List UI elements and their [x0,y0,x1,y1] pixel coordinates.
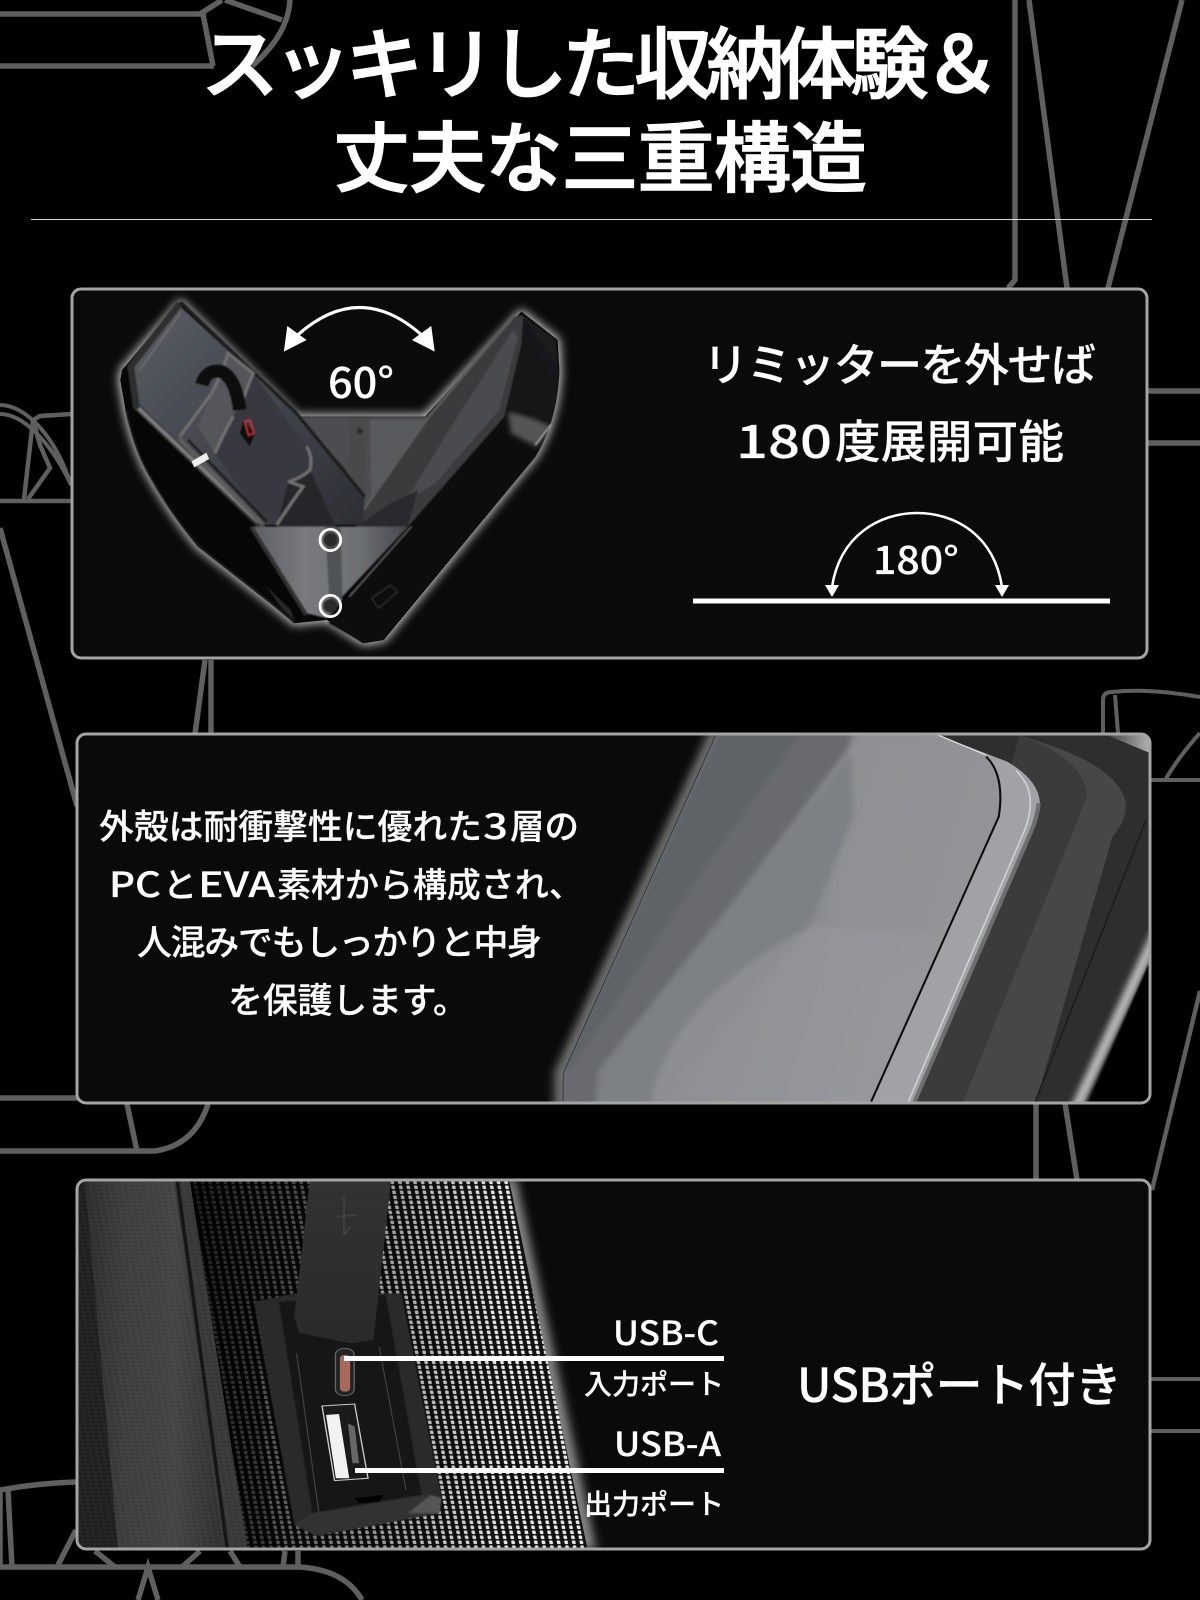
bright rim [868,733,1040,1107]
front gusset [251,527,408,618]
red logo tag [240,421,255,447]
photo: opened backpack [120,302,559,643]
panel: USB ports [73,1178,1150,1550]
label: 60 degrees: 60° [328,350,394,411]
text: shell description: PC [109,857,161,907]
left inner lid [134,305,365,525]
label: output port: 出力ポート [584,1483,724,1523]
heading: USB ports: USBポート付き [797,1347,1122,1416]
center gusset back [299,417,430,510]
rubber flap [294,1178,391,1343]
white tag [192,453,209,467]
title: 丈夫な三重構造 [333,98,867,209]
left fabric strips [78,1182,118,1548]
woven mesh [189,1178,588,1550]
text: shell description: を保護します。 [228,973,468,1024]
label: input port: 入力ポート [584,1363,724,1403]
arrow: 60 degree swing [284,307,435,352]
text: 180 degree opening: 度展開可能 [835,406,1064,472]
label: USB-A: USB-A [614,1418,722,1466]
title: スッキリした収納体験＆ [201,3,1001,115]
text: shell description: 外殻は耐衝撃性に優れた [99,800,482,850]
callout line: USB-A [355,1468,724,1473]
photo: layered hard shell [561,730,1164,1110]
lid pockets [198,353,253,453]
diagram: 180 degree arc: 180° [873,530,959,585]
text: shell description: 層の [510,799,579,849]
callout line: USB-C [344,1356,724,1361]
grab handle [202,371,240,410]
text: shell description: 素材から構成され、 [277,858,583,907]
black seam [870,757,1000,1103]
text: shell description: 3 [483,800,508,850]
USB-A port [322,1404,368,1481]
outer dark layers [942,736,1148,1102]
text: limiter release: リミッターを外せば [703,329,1096,394]
USB-C port [335,1348,354,1396]
port module [254,1293,442,1536]
main face [561,733,1001,1107]
text: shell description: と [163,858,197,907]
panel: 60 degree opening [72,289,1147,658]
title [201,3,1001,209]
text: shell description: 人混みでもしっかりと中身 [137,915,542,966]
text: 180 degree opening: 180 [736,406,832,471]
panel: shell structure [77,730,1164,1110]
text: 180 degree opening [736,406,1064,472]
right inner lid [356,315,523,527]
snap button rings [320,529,341,551]
diagram: 180 degree arc [693,513,1110,604]
back padding [126,410,294,622]
text: shell description: EVA [198,857,276,907]
text: shell description [99,799,583,1024]
black lower right corner [1077,933,1157,1107]
right shell [329,315,559,643]
photo: USB port module [73,1178,589,1550]
label: USB-C: USB-C [613,1307,719,1355]
title divider [31,219,1152,220]
